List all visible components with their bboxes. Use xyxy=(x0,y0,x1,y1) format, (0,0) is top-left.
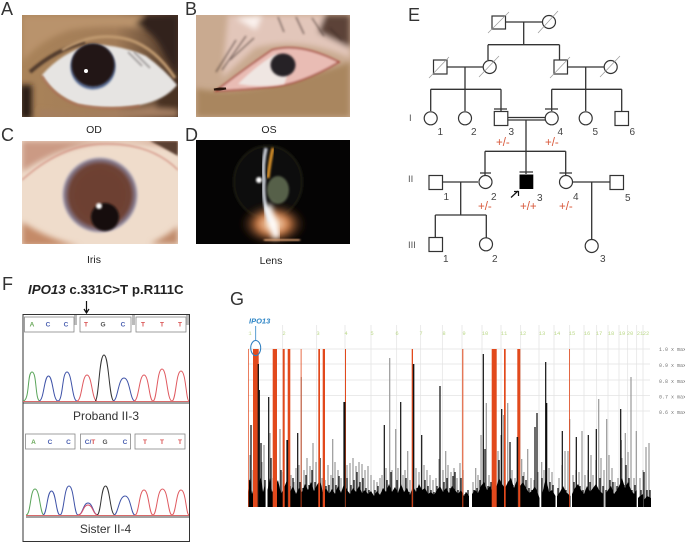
chromosome labels: 22 xyxy=(643,330,649,337)
caption Iris: Iris xyxy=(87,254,101,266)
sister label: Sister II-4 xyxy=(80,522,131,536)
generation II xyxy=(408,174,631,204)
chromosome labels: 5 xyxy=(370,330,374,337)
panel label C: C xyxy=(1,125,14,145)
grid xyxy=(248,349,650,411)
genotype labels: +/- xyxy=(496,137,510,149)
generation II: 3 xyxy=(537,193,543,204)
proband base calls: C xyxy=(121,322,126,328)
generation I: 6 xyxy=(630,127,636,138)
caption OD: OD xyxy=(86,124,102,136)
generation I: 4 xyxy=(558,127,564,138)
genotype labels xyxy=(478,137,573,213)
proband base calls: T xyxy=(160,322,164,328)
chromosome labels: 4 xyxy=(344,330,348,337)
chromosome labels: 11 xyxy=(501,330,508,337)
mutation arrow xyxy=(84,301,89,313)
generation III: III xyxy=(408,240,416,251)
sister base calls: G xyxy=(102,439,108,446)
proband arrow xyxy=(511,191,518,198)
sister base calls: C xyxy=(66,439,71,446)
red homozygous regions xyxy=(248,349,570,507)
solid jagged base xyxy=(248,476,651,507)
chromosome labels: 15 xyxy=(569,330,575,337)
proband base calls: T xyxy=(178,322,182,328)
generation I: 2 xyxy=(471,127,477,138)
generation 0 xyxy=(488,11,558,33)
panel F title: IPO13 c.331C>T p.R111C xyxy=(28,282,184,297)
generation I: I xyxy=(409,113,412,124)
chromosome labels: 18 xyxy=(608,330,614,337)
generation II: 5 xyxy=(625,193,631,204)
chromosome labels: 17 xyxy=(596,330,602,337)
chromosome labels: 1 xyxy=(248,330,252,337)
proband label: Proband II-3 xyxy=(73,409,139,423)
sister base calls: C xyxy=(48,439,53,446)
pedigree chart xyxy=(408,11,636,265)
sister base calls: T xyxy=(160,439,164,446)
generation II: 4 xyxy=(573,192,579,203)
sister base calls: T xyxy=(143,439,147,446)
generation I xyxy=(409,112,636,138)
generation III xyxy=(408,238,606,265)
chromosome labels: 14 xyxy=(554,330,561,337)
deceased grandparents xyxy=(429,56,620,78)
sister base calls: C xyxy=(123,439,128,446)
generation II: II xyxy=(408,174,413,185)
IPO13 marker xyxy=(249,316,271,356)
proband base calls: C xyxy=(64,322,69,328)
chromosome labels: 12 xyxy=(520,330,526,337)
chromosome labels: 13 xyxy=(539,330,545,337)
sister trace xyxy=(26,486,189,515)
photo A: right eye xyxy=(20,15,180,119)
photo C: iris xyxy=(22,141,178,246)
proband base calls: A xyxy=(30,322,35,328)
caption Lens: Lens xyxy=(260,255,282,267)
generation II: 2 xyxy=(491,192,497,203)
panel G linkage chart xyxy=(248,316,685,507)
caption OS: OS xyxy=(261,124,277,136)
proband base calls: C xyxy=(46,322,51,328)
proband trace xyxy=(23,355,189,401)
proband base calls: T xyxy=(84,322,88,328)
sister base calls: C/T xyxy=(85,439,95,446)
overlaid black peaks xyxy=(258,364,518,507)
generation III: 2 xyxy=(492,254,498,265)
chromosome labels: 9 xyxy=(462,330,466,337)
generation I: 1 xyxy=(438,127,444,138)
chromosome labels: 3 xyxy=(316,330,320,337)
chromosome labels: 16 xyxy=(584,330,590,337)
chromosome labels: 10 xyxy=(482,330,488,337)
chromosome labels: 6 xyxy=(395,330,399,337)
generation I: 5 xyxy=(592,127,598,138)
black filler peaks xyxy=(249,354,650,507)
proband base calls: T xyxy=(141,322,145,328)
chromosome labels xyxy=(248,330,649,337)
chromosome labels: 21 xyxy=(637,330,644,337)
panel label E: E xyxy=(408,5,420,25)
panel label D: D xyxy=(185,125,198,145)
generation III: 3 xyxy=(600,254,606,265)
generation II: 1 xyxy=(444,192,450,203)
IPO13 marker: IPO13 xyxy=(249,316,271,326)
chromosome labels: 20 xyxy=(627,330,633,337)
panel F sequencing chromatograms xyxy=(23,314,190,542)
chromosome labels: 8 xyxy=(442,330,446,337)
panel label G: G xyxy=(230,289,244,309)
y axis labels xyxy=(659,347,685,416)
genotype labels: +/- xyxy=(559,201,573,213)
sister base calls: T xyxy=(178,439,182,446)
chromosome labels: 19 xyxy=(619,330,625,337)
sister base calls: A xyxy=(31,439,36,446)
photo B: left eye xyxy=(196,15,350,117)
generation I: 3 xyxy=(508,127,514,138)
generation III: 1 xyxy=(443,254,449,265)
genotype labels: +/+ xyxy=(520,201,537,213)
panel label F: F xyxy=(2,274,13,294)
proband base calls xyxy=(24,317,186,332)
chromosome labels: 2 xyxy=(282,330,286,337)
photo D: lens xyxy=(196,140,350,246)
genotype labels: +/- xyxy=(545,137,559,149)
gray filler peaks xyxy=(250,358,649,507)
genotype labels: +/- xyxy=(478,201,492,213)
sister base calls xyxy=(26,434,185,449)
chromosome labels: 7 xyxy=(419,330,423,337)
proband base calls: G xyxy=(100,322,106,328)
